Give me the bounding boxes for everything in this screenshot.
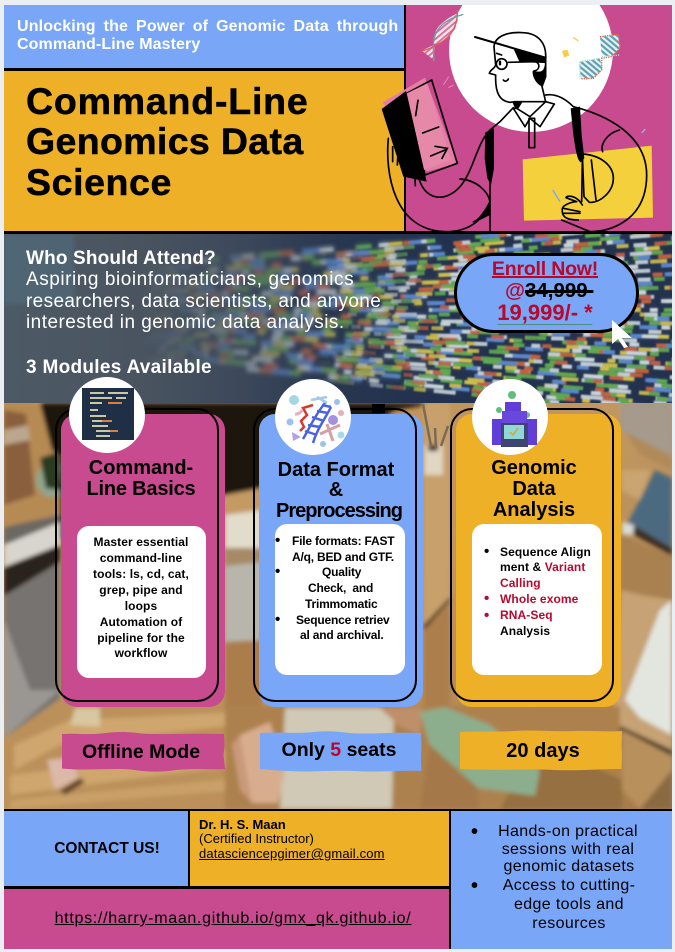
panel: contact us [4,811,188,886]
panel: features list [451,811,672,949]
card text box: command-line [100,551,182,565]
contact heading: CONTACT US! [54,840,160,857]
yellow sheet [523,146,653,221]
main title: Science [26,161,172,203]
card text box: grep, pipe and [99,583,183,597]
panel: features list: • [471,821,478,843]
bullet list: RNA-Seq [500,608,553,622]
bullet list: Analysis [500,624,550,638]
panel: features list: • [471,875,478,897]
card text box: tools: ls, cd, cat, [93,567,189,581]
card: command-line basics [55,377,225,707]
badge: only 5 seats [260,731,422,772]
panel: instructor details [190,811,449,886]
card heading: Analysis [493,499,575,521]
card heading: & [329,479,343,501]
book [383,78,457,172]
panel: illustration background [405,5,672,231]
audience description [26,269,381,333]
left DNA helix [420,10,463,62]
subtitle text: Unlocking the Power of Genomic Data through [17,18,398,35]
confetti [562,50,569,57]
bullet list: • [275,532,280,549]
panel: website link [4,889,449,949]
subtitle text: Command-Line Mastery [17,36,200,53]
sunlit desk lower left [4,697,240,809]
bottom centre desk, notebook, arm and hand [225,706,620,809]
head [489,32,546,102]
card text box: Master essential [94,535,188,549]
right DNA helix [579,34,620,79]
bullet list: • [484,607,489,624]
bullet list: A/q, BED and GTF. [292,550,394,564]
panel: code photo background [4,234,672,403]
instructor role: (Certified Instructor) [199,831,314,846]
cloth and keyboard tray [4,515,60,555]
card text box [275,524,405,675]
panel: features list: resources [532,915,606,932]
bullet list [275,532,394,642]
bullet list: Whole exome [500,592,578,606]
panel: features list: genomic datasets [503,858,635,875]
website url: https://harry-maan.github.io/gmx_qk.github.io/ [55,910,411,927]
price: 19,999/- * [497,300,593,325]
instructor name: Dr. H. S. Maan [199,817,286,832]
card heading [87,457,195,500]
card heading: Data [512,478,556,500]
panel: audience text [26,248,381,378]
card heading: Preprocessing [276,500,402,522]
bullet list: • [484,590,489,607]
instructor email: datasciencepgimer@gmail.com [199,846,385,861]
black shoulder straps [571,107,584,162]
panel: features list: edge tools and [514,896,624,913]
bullet list: Sequence Align [500,545,591,559]
icon: server computer [472,379,548,455]
bullet list: • [484,543,489,560]
main title: Genomics Data [26,120,304,162]
white circle [449,0,613,132]
badge: offline mode: Offline Mode [82,741,200,763]
panel: top subtitle band [4,5,404,68]
badge: 20 days [460,730,622,770]
card heading: Line Basics [87,478,195,500]
pencils in cup [423,404,448,448]
bullet list: al and archival. [300,628,384,642]
torso and collar [490,108,513,130]
card heading: Genomic [491,457,577,479]
panel: features list: sessions with real [502,841,634,858]
black tab on outline [372,404,385,413]
card text box [77,526,206,678]
card: data format and preprocessing [253,379,423,707]
bullet list: Trimmomatic [305,597,378,611]
left desk items [4,403,60,525]
bullet list: Sequence retriev [296,613,390,627]
card text box: workflow [115,646,167,660]
card text box: Automation of [100,615,182,629]
panel: desk photo background [4,403,672,809]
audience description: researchers, data scientists, and anyone [26,290,381,312]
card text box: pipeline for the [97,631,185,645]
card heading [276,459,402,522]
heading: modules available: 3 Modules Available [26,357,212,378]
bullet list: • [275,611,280,628]
panel: title band [4,70,404,231]
icon: mouse cursor [612,320,632,348]
card: genomic data analysis [450,379,621,707]
main title [26,80,309,203]
monitor and keyboard between cards [60,403,440,540]
right sleeve [602,130,619,152]
card heading: Command- [89,457,193,479]
cup between right cards [424,403,450,625]
hand [562,162,582,220]
price: @34,999 [505,279,588,302]
badge: only 5 seats: Only 5 seats [282,738,396,760]
price [497,279,594,325]
subtitle text [17,18,398,53]
heading: who should attend: Who Should Attend? [26,248,216,269]
panel: features list: Hands-on practical [498,823,638,840]
card text box: loops [125,599,157,613]
right side objects [620,403,672,455]
bullet list: File formats: FAST [292,534,394,548]
badge: offline mode [62,732,225,772]
card heading [491,457,577,521]
card text box [472,524,602,675]
audience description: Aspiring bioinformaticians, genomics [26,269,354,290]
main title: Command-Line [26,80,309,122]
callout: enroll now button [454,253,639,333]
icon: code screenshot [69,377,145,453]
bullet list: ment & Variant [500,560,585,574]
enroll heading: Enroll Now! [492,258,598,280]
bullet list: • [275,563,280,580]
badge: 20 days: 20 days [506,740,580,762]
audience description: interested in genomic data analysis. [26,312,345,333]
illustration: scientist reading a book [382,5,653,231]
icon: DNA and molecules [275,379,351,455]
bullet list: Quality [322,565,361,579]
bullet list [484,543,591,638]
bullet list: Check, and [308,581,373,595]
bullet list: Calling [500,576,541,590]
panel: features list: Access to cutting- [503,877,635,894]
card heading: Data Format [278,459,394,481]
